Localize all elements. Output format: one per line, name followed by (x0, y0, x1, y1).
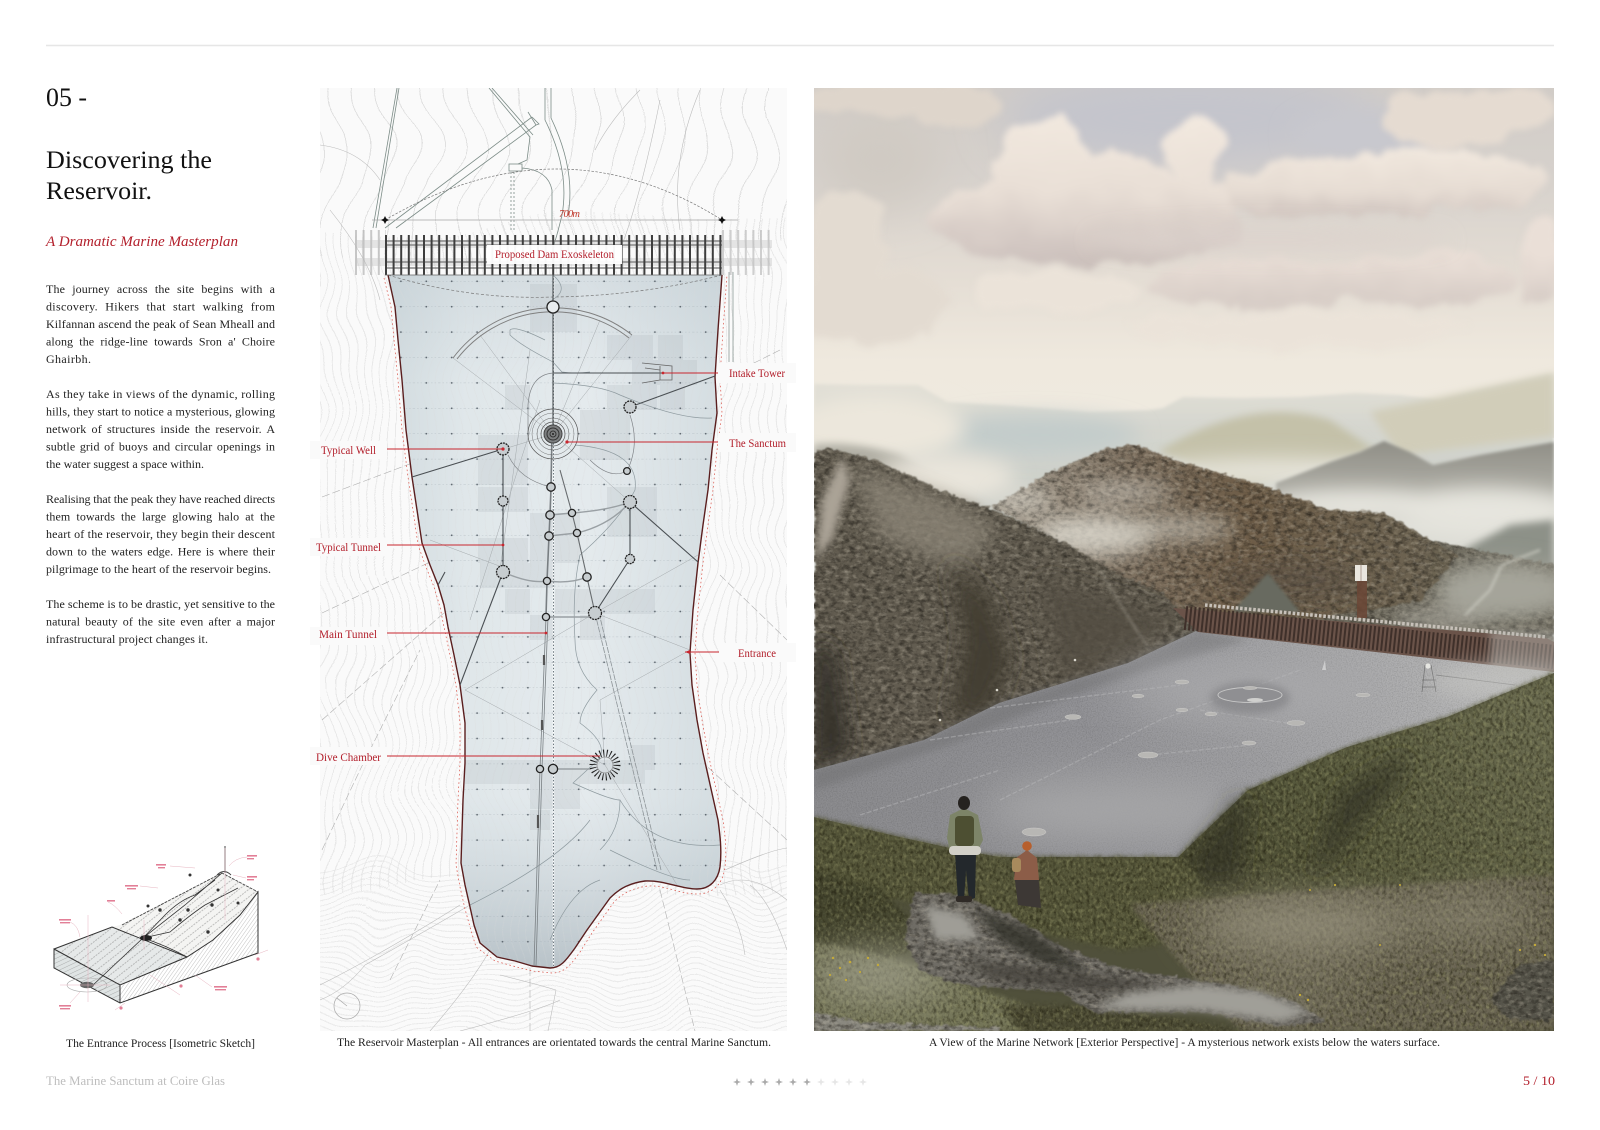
red annotation leaders (60, 848, 268, 1010)
isometric sketch of the entrance process (54, 846, 268, 1010)
paragraph 2: hills, they start to notice a mysterious, glowing (46, 404, 275, 418)
small dark summit by dam (1232, 573, 1300, 612)
coat (947, 808, 983, 850)
foreground grass base (814, 673, 1554, 1031)
shore lights (939, 659, 1076, 721)
reservoir water body (384, 275, 728, 974)
hillside rock shadows (1190, 750, 1410, 890)
block outline (54, 892, 258, 1003)
circular openings (1022, 680, 1370, 836)
soft cloud underside blend (1090, 226, 1450, 254)
page number: 5 / 10 (1523, 1073, 1555, 1088)
yellow wildflowers (829, 884, 1546, 1001)
dotted axis overlay (553, 275, 554, 966)
blue-grey sky right (1366, 134, 1403, 151)
callout: main tunnel: Main Tunnel (319, 627, 378, 641)
dam cross beams (385, 241, 722, 268)
completed pages (733, 1078, 811, 1086)
faded dam extension left (355, 230, 386, 275)
access lines to reservoir edge (412, 373, 715, 685)
dark main axis (552, 268, 554, 434)
faded dam extension right (722, 230, 772, 275)
dive chamber (593, 753, 617, 777)
paragraph 2: subtle grid of buoys and circular openings in (46, 440, 275, 454)
main tunnel upper (546, 434, 552, 617)
top road and access route (373, 88, 570, 250)
paragraph 1: Kilfannan ascend the peak of Sean Mheall and (46, 317, 275, 331)
sky gradient (814, 88, 1554, 438)
plan paper (320, 88, 787, 1031)
exterior perspective scene (785, 68, 1575, 1031)
callout: typical tunnel: Typical Tunnel (316, 540, 382, 554)
central halo (1210, 682, 1290, 714)
major contour lines (320, 90, 787, 1031)
dashed setting-out lines (322, 350, 787, 1031)
left mist (785, 394, 965, 462)
page progress markers (733, 1078, 867, 1086)
callout: typical well (310, 441, 505, 459)
caption: isometric sketch: The Entrance Process [Isometric Sketch] (66, 1038, 255, 1050)
callout: intake tower (662, 363, 796, 383)
section number: 05 - (46, 83, 87, 112)
heading: Discovering the (46, 147, 212, 174)
lower body (1014, 872, 1041, 908)
label: proposed dam: Proposed Dam Exoskeleton (495, 247, 614, 261)
head beanie (958, 796, 970, 810)
dark gully (950, 560, 1010, 720)
callout: dive chamber: Dive Chamber (316, 750, 381, 764)
heading (46, 147, 212, 205)
boundary red dotted offset (384, 275, 727, 973)
slope contour hatching (112, 873, 258, 957)
label: proposed dam (487, 245, 622, 264)
rock outcrop (814, 892, 1554, 1031)
lower right misty meadow (1130, 875, 1554, 1031)
legs (955, 853, 976, 900)
clouds (790, 82, 1560, 345)
water surface (814, 630, 1554, 857)
mist by dam end (1430, 664, 1570, 700)
internal detail clipped to reservoir (388, 275, 722, 967)
slope surface (112, 873, 258, 957)
paragraph 3: heart of the reservoir, they begin their descent (46, 527, 276, 541)
red annotation marks (59, 855, 260, 1010)
upper contours (320, 88, 787, 264)
main tunnel lozenges (538, 655, 544, 828)
right ridge (1276, 441, 1554, 640)
bag (1012, 858, 1021, 872)
paragraph 1: along the ridge-line towards Sron a' Choire (46, 334, 275, 348)
top-right cloud (1382, 88, 1558, 146)
ridge line (122, 873, 258, 925)
ring around sanctum route (508, 373, 634, 487)
lower centre grass (1000, 1005, 1250, 1031)
arc gallery (453, 308, 632, 359)
flat reservoir hatching (54, 927, 187, 985)
main rock mass (905, 892, 1327, 1026)
sunlit ridge (816, 456, 850, 560)
paragraph 4: natural beauty of the site even after a major (46, 614, 275, 628)
caption: exterior perspective: A View of the Marine Network [Exterior Perspective] - A mysterious network exists below the waters surface. (929, 1037, 1440, 1049)
callout: dive chamber (310, 747, 600, 765)
paragraph 2: the water suggest a space within. (46, 457, 204, 471)
radial sight lines (412, 320, 698, 890)
river course (470, 275, 720, 940)
mountain shadow on water (814, 630, 1250, 790)
callout: typical tunnel (310, 538, 504, 556)
lower left stones (814, 1012, 1000, 1031)
faint bathymetric contours (360, 260, 760, 980)
footer project title: The Marine Sanctum at Coire Glas (46, 1073, 225, 1088)
paragraph 4: The scheme is to be drastic, yet sensitive to the (46, 597, 275, 611)
callout: the sanctum (565, 433, 796, 452)
subheading: A Dramatic Marine Masterplan (45, 234, 238, 250)
dark right flank (1040, 580, 1180, 680)
olive middle hill (1158, 412, 1375, 485)
intake tower (642, 363, 672, 383)
tan right hill (1370, 373, 1554, 455)
far left ridge (814, 444, 985, 530)
paragraph 3: pilgrimage to the heart of the reservoir begins. (46, 562, 271, 576)
lower left fog (808, 951, 952, 999)
dashed crest arc (385, 169, 722, 220)
main tunnel down to dive chamber (534, 617, 548, 966)
top-left cloud (814, 88, 1002, 126)
paragraph 1: The journey across the site begins with a (46, 282, 276, 296)
right green hillside (1178, 673, 1554, 915)
caption: masterplan: The Reservoir Masterplan - All entrances are orientated towards the central Marine Sanctum. (337, 1037, 771, 1049)
reservoir water (814, 630, 1554, 857)
sloped tunnel (560, 470, 595, 613)
grey sky left (856, 157, 906, 192)
end markers (381, 216, 726, 224)
observation jetty (1422, 665, 1515, 692)
main cumulus (928, 114, 1240, 264)
hazy left clouds (814, 192, 930, 346)
reflected glow (980, 778, 1240, 842)
remaining pages (817, 1078, 867, 1086)
soft cloud reflection (1120, 666, 1380, 714)
upper slope light (850, 465, 1000, 570)
mountain mass (814, 448, 1200, 775)
left mountain (814, 448, 1200, 775)
meadow fog (1190, 899, 1540, 1004)
lower rock shadow (960, 960, 1170, 992)
paragraph 3: Realising that the peak they have reached directs (46, 492, 275, 506)
lower contours (320, 855, 787, 1031)
long service tunnel (595, 613, 661, 870)
front section hatch (54, 949, 120, 1003)
right valley mist (1270, 488, 1575, 536)
right stones (1490, 960, 1554, 1020)
paragraph 1: Ghairbh. (46, 352, 91, 366)
right section hatch (120, 892, 258, 1003)
spillway channel (729, 272, 733, 362)
dimension label: 700m (559, 209, 580, 220)
lower valley behind dam (1198, 530, 1554, 680)
dam exoskeleton (1173, 605, 1560, 675)
reservoir fill (388, 275, 722, 968)
callout: entrance (685, 643, 796, 662)
dotted central axis (552, 275, 554, 970)
boundary dark line (388, 275, 722, 968)
callout: entrance: Entrance (738, 646, 776, 660)
tunnel lines (92, 873, 238, 986)
dam crest (1205, 605, 1546, 637)
dam dimension (372, 169, 738, 224)
callout: the sanctum: The Sanctum (729, 436, 787, 450)
mid contours (290, 225, 820, 895)
dam crest marker line (385, 274, 722, 276)
grey grid patches (465, 284, 697, 830)
far left ridge mist (875, 454, 1015, 502)
paragraph 3: them towards the large glowing halo at the (46, 510, 275, 524)
paragraph 2: network of structures inside the reservoir. A (46, 422, 275, 436)
jacket (1014, 850, 1039, 880)
large boulder highlight (1095, 985, 1310, 1022)
tunnel network (412, 268, 715, 966)
central dark node (140, 935, 152, 941)
dam haze at right (1490, 630, 1560, 675)
paragraph 3 (46, 492, 276, 576)
central peak mist bands (997, 483, 1360, 600)
small buoy boat (1322, 660, 1326, 670)
jetty light (1425, 663, 1431, 669)
central peak (991, 444, 1458, 640)
entrance node (80, 982, 94, 988)
summit marker (217, 846, 231, 875)
dark lower gully (814, 640, 850, 772)
valley mist (1390, 560, 1575, 634)
dimension line (372, 219, 738, 221)
central mist (1150, 458, 1410, 486)
faded dam band lower (355, 258, 772, 266)
paragraph 4 (46, 597, 275, 646)
dam body (1173, 608, 1554, 672)
lower banks (1050, 273, 1060, 276)
heading: Reservoir. (46, 178, 152, 205)
blue-grey open sky (1018, 88, 1338, 169)
callout: main tunnel (310, 627, 547, 645)
reservoir masterplan (316, 88, 787, 1031)
backpack (955, 816, 974, 846)
faded dam band (355, 240, 772, 248)
paragraph 4: infrastructural project changes it. (46, 632, 208, 646)
right cumulus (1225, 147, 1540, 218)
rock crest highlight (925, 905, 980, 940)
front water section (54, 949, 120, 1003)
body text (46, 282, 276, 646)
hiker in orange hat (1012, 841, 1041, 908)
tower (1355, 565, 1367, 618)
far range silhouette (814, 373, 1554, 600)
paragraph 3: down to the waters edge. Here is where their (46, 544, 275, 558)
grid of buoys (380, 270, 730, 970)
paragraph 2 (46, 387, 275, 471)
paragraph 1 (46, 282, 276, 366)
plan background and contours (320, 88, 787, 1031)
left corner grass (814, 870, 935, 965)
rock shadow (975, 908, 1090, 972)
reservoir shading (380, 270, 730, 975)
dashed crest reflection (388, 275, 722, 297)
far mountain range (785, 373, 1554, 600)
dam columns (385, 235, 722, 275)
curved galleries (503, 502, 630, 769)
callout: intake tower: Intake Tower (729, 366, 785, 380)
near bank grass (814, 817, 1210, 950)
bedroll (949, 846, 981, 855)
north compass (334, 993, 360, 1019)
paragraph 1: discovery. Hikers that start walking from (46, 300, 276, 314)
right forest slope (1400, 520, 1554, 640)
the sanctum rings (528, 409, 578, 459)
streak (1100, 570, 1150, 650)
paragraph 2: As they take in views of the dynamic, rolling (46, 387, 275, 401)
flat reservoir top (54, 927, 187, 985)
submerged tunnel lines (860, 670, 1300, 815)
callout: typical well: Typical Well (321, 443, 377, 457)
orange hat (1022, 841, 1032, 851)
stream in valley (1465, 550, 1540, 615)
sky (814, 68, 1554, 438)
proposed dam exoskeleton (355, 240, 772, 275)
boots (956, 896, 972, 902)
typical wells (496, 301, 636, 774)
top divider rule (46, 44, 1554, 46)
lower left misty grass (814, 940, 1100, 1031)
blue valley (930, 415, 1140, 455)
entrance ring (67, 978, 107, 992)
dam columns (1185, 618, 1554, 657)
wells on slope (146, 874, 240, 934)
hiker with backpack (947, 796, 983, 902)
